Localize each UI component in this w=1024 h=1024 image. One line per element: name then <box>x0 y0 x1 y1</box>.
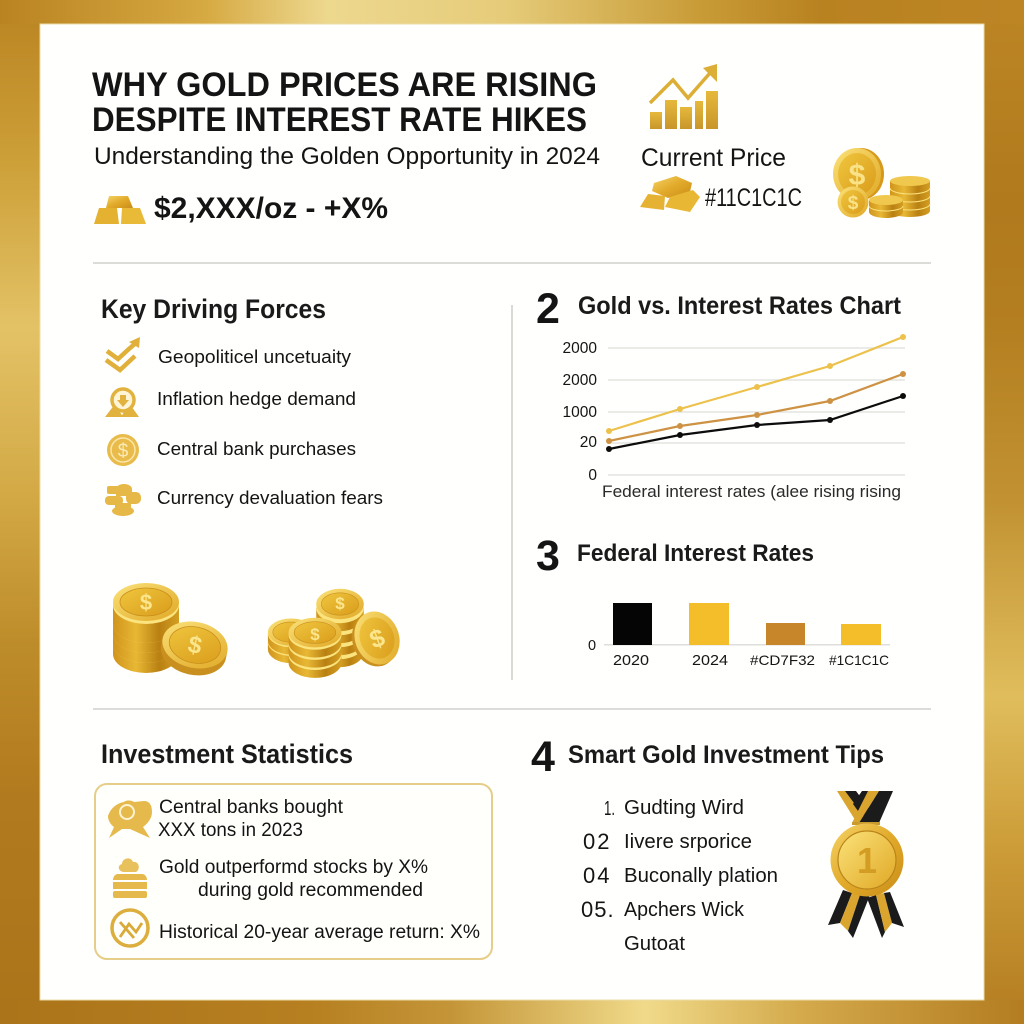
icon: coins with stack <box>833 148 930 218</box>
tips list <box>581 797 778 955</box>
tips list: 02 <box>583 829 611 854</box>
item: currency devaluation fears <box>105 484 383 516</box>
bar chart: #1C1C1C <box>829 652 889 668</box>
tips list: 05. <box>581 897 615 922</box>
icon: gold medal with ribbon: 1 <box>857 840 877 881</box>
chart caption: Federal interest rates (alee rising rising <box>602 482 901 501</box>
stat: gold outperformed: during gold recommended <box>198 880 423 901</box>
line chart: 2000 <box>563 340 597 357</box>
item: inflation hedge demand: Inflation hedge demand <box>157 388 356 409</box>
item: geopolitical uncertainty: Geopoliticel uncetuaity <box>158 346 352 367</box>
item: central bank purchases: $ <box>118 441 129 462</box>
bar chart heading: Federal Interest Rates <box>577 540 814 567</box>
icon: gold bars small <box>94 196 146 224</box>
series: interest rates <box>606 393 906 452</box>
chart heading: Gold vs. Interest Rates Chart <box>578 292 902 320</box>
tips heading: Smart Gold Investment Tips <box>568 741 884 769</box>
panel: federal interest rates <box>536 532 890 669</box>
subtitle: Understanding the Golden Opportunity in 2024 <box>94 143 600 170</box>
icon: rising bar chart with arrow <box>650 64 718 129</box>
stat: historical return: Historical 20-year average return: X% <box>159 922 480 943</box>
tips list: 1. <box>604 798 615 820</box>
icon: gold medal with ribbon <box>828 791 904 938</box>
price figure: $2,XXX/oz - +X% <box>154 192 388 225</box>
item: inflation hedge demand <box>105 388 356 417</box>
tips list: 04 <box>583 863 611 888</box>
coin stack left <box>113 583 232 681</box>
section number 4: 4 <box>531 733 555 781</box>
coin stack left: $ <box>140 590 152 615</box>
tips list: Gudting Wird <box>624 797 744 819</box>
line chart: 20 <box>580 434 597 451</box>
current price label: Current Price <box>641 144 786 172</box>
line chart: 1000 <box>563 404 597 421</box>
tips list: Apchers Wick <box>624 899 745 921</box>
bar chart: #CD7F32 <box>750 652 815 668</box>
heading: Key Driving Forces <box>101 294 326 324</box>
line chart: 2000 <box>563 372 597 389</box>
bar chart: 2020 <box>613 652 649 669</box>
tips list: Buconally plation <box>624 865 778 887</box>
section number 2: 2 <box>536 285 560 333</box>
stat: central banks <box>108 797 344 841</box>
stat: gold outperformed <box>113 857 428 901</box>
item: central bank purchases: Central bank purchases <box>157 438 356 459</box>
statistics box <box>95 784 492 959</box>
header section <box>92 64 930 225</box>
series: gold <box>606 334 906 434</box>
bar chart: 0 <box>588 638 596 654</box>
bar chart <box>588 603 890 669</box>
coin stack right: $ <box>310 625 320 644</box>
section number 3: 3 <box>536 532 560 580</box>
panel: investment statistics <box>95 739 492 959</box>
stat: historical return <box>112 910 480 946</box>
coin stack left: $ <box>186 631 205 660</box>
series: bronze <box>606 371 906 444</box>
item: central bank purchases <box>107 434 356 466</box>
hex code label: #11C1C1C <box>705 184 802 212</box>
coin stack right <box>268 589 407 678</box>
stat: central banks: Central banks bought <box>159 797 344 818</box>
line chart <box>563 334 906 501</box>
tips list: Gutoat <box>624 933 685 955</box>
line chart: 0 <box>588 467 597 484</box>
divider <box>93 262 931 264</box>
icon: gold bars <box>640 176 700 212</box>
stat: central banks: XXX tons in 2023 <box>158 820 303 841</box>
coin stack right: $ <box>366 623 389 654</box>
title <box>92 66 597 139</box>
icon: coins with stack: $ <box>848 193 859 214</box>
title: DESPITE INTEREST RATE HIKES <box>92 101 587 139</box>
panel: gold vs interest rates chart <box>536 285 906 501</box>
item: currency devaluation fears: Currency devaluation fears <box>157 487 383 508</box>
icon: coins with stack: $ <box>849 159 866 192</box>
item: geopolitical uncertainty <box>106 337 352 370</box>
panel: smart gold investment tips <box>531 733 904 955</box>
stat: gold outperformed: Gold outperformd stocks by X% <box>159 857 428 878</box>
coin stack right: $ <box>335 594 345 613</box>
bar chart: 2024 <box>692 652 728 669</box>
tips list: Iivere srporice <box>624 831 752 853</box>
panel: key driving forces <box>101 294 407 681</box>
title: WHY GOLD PRICES ARE RISING <box>92 66 597 104</box>
heading: Investment Statistics <box>101 739 353 769</box>
